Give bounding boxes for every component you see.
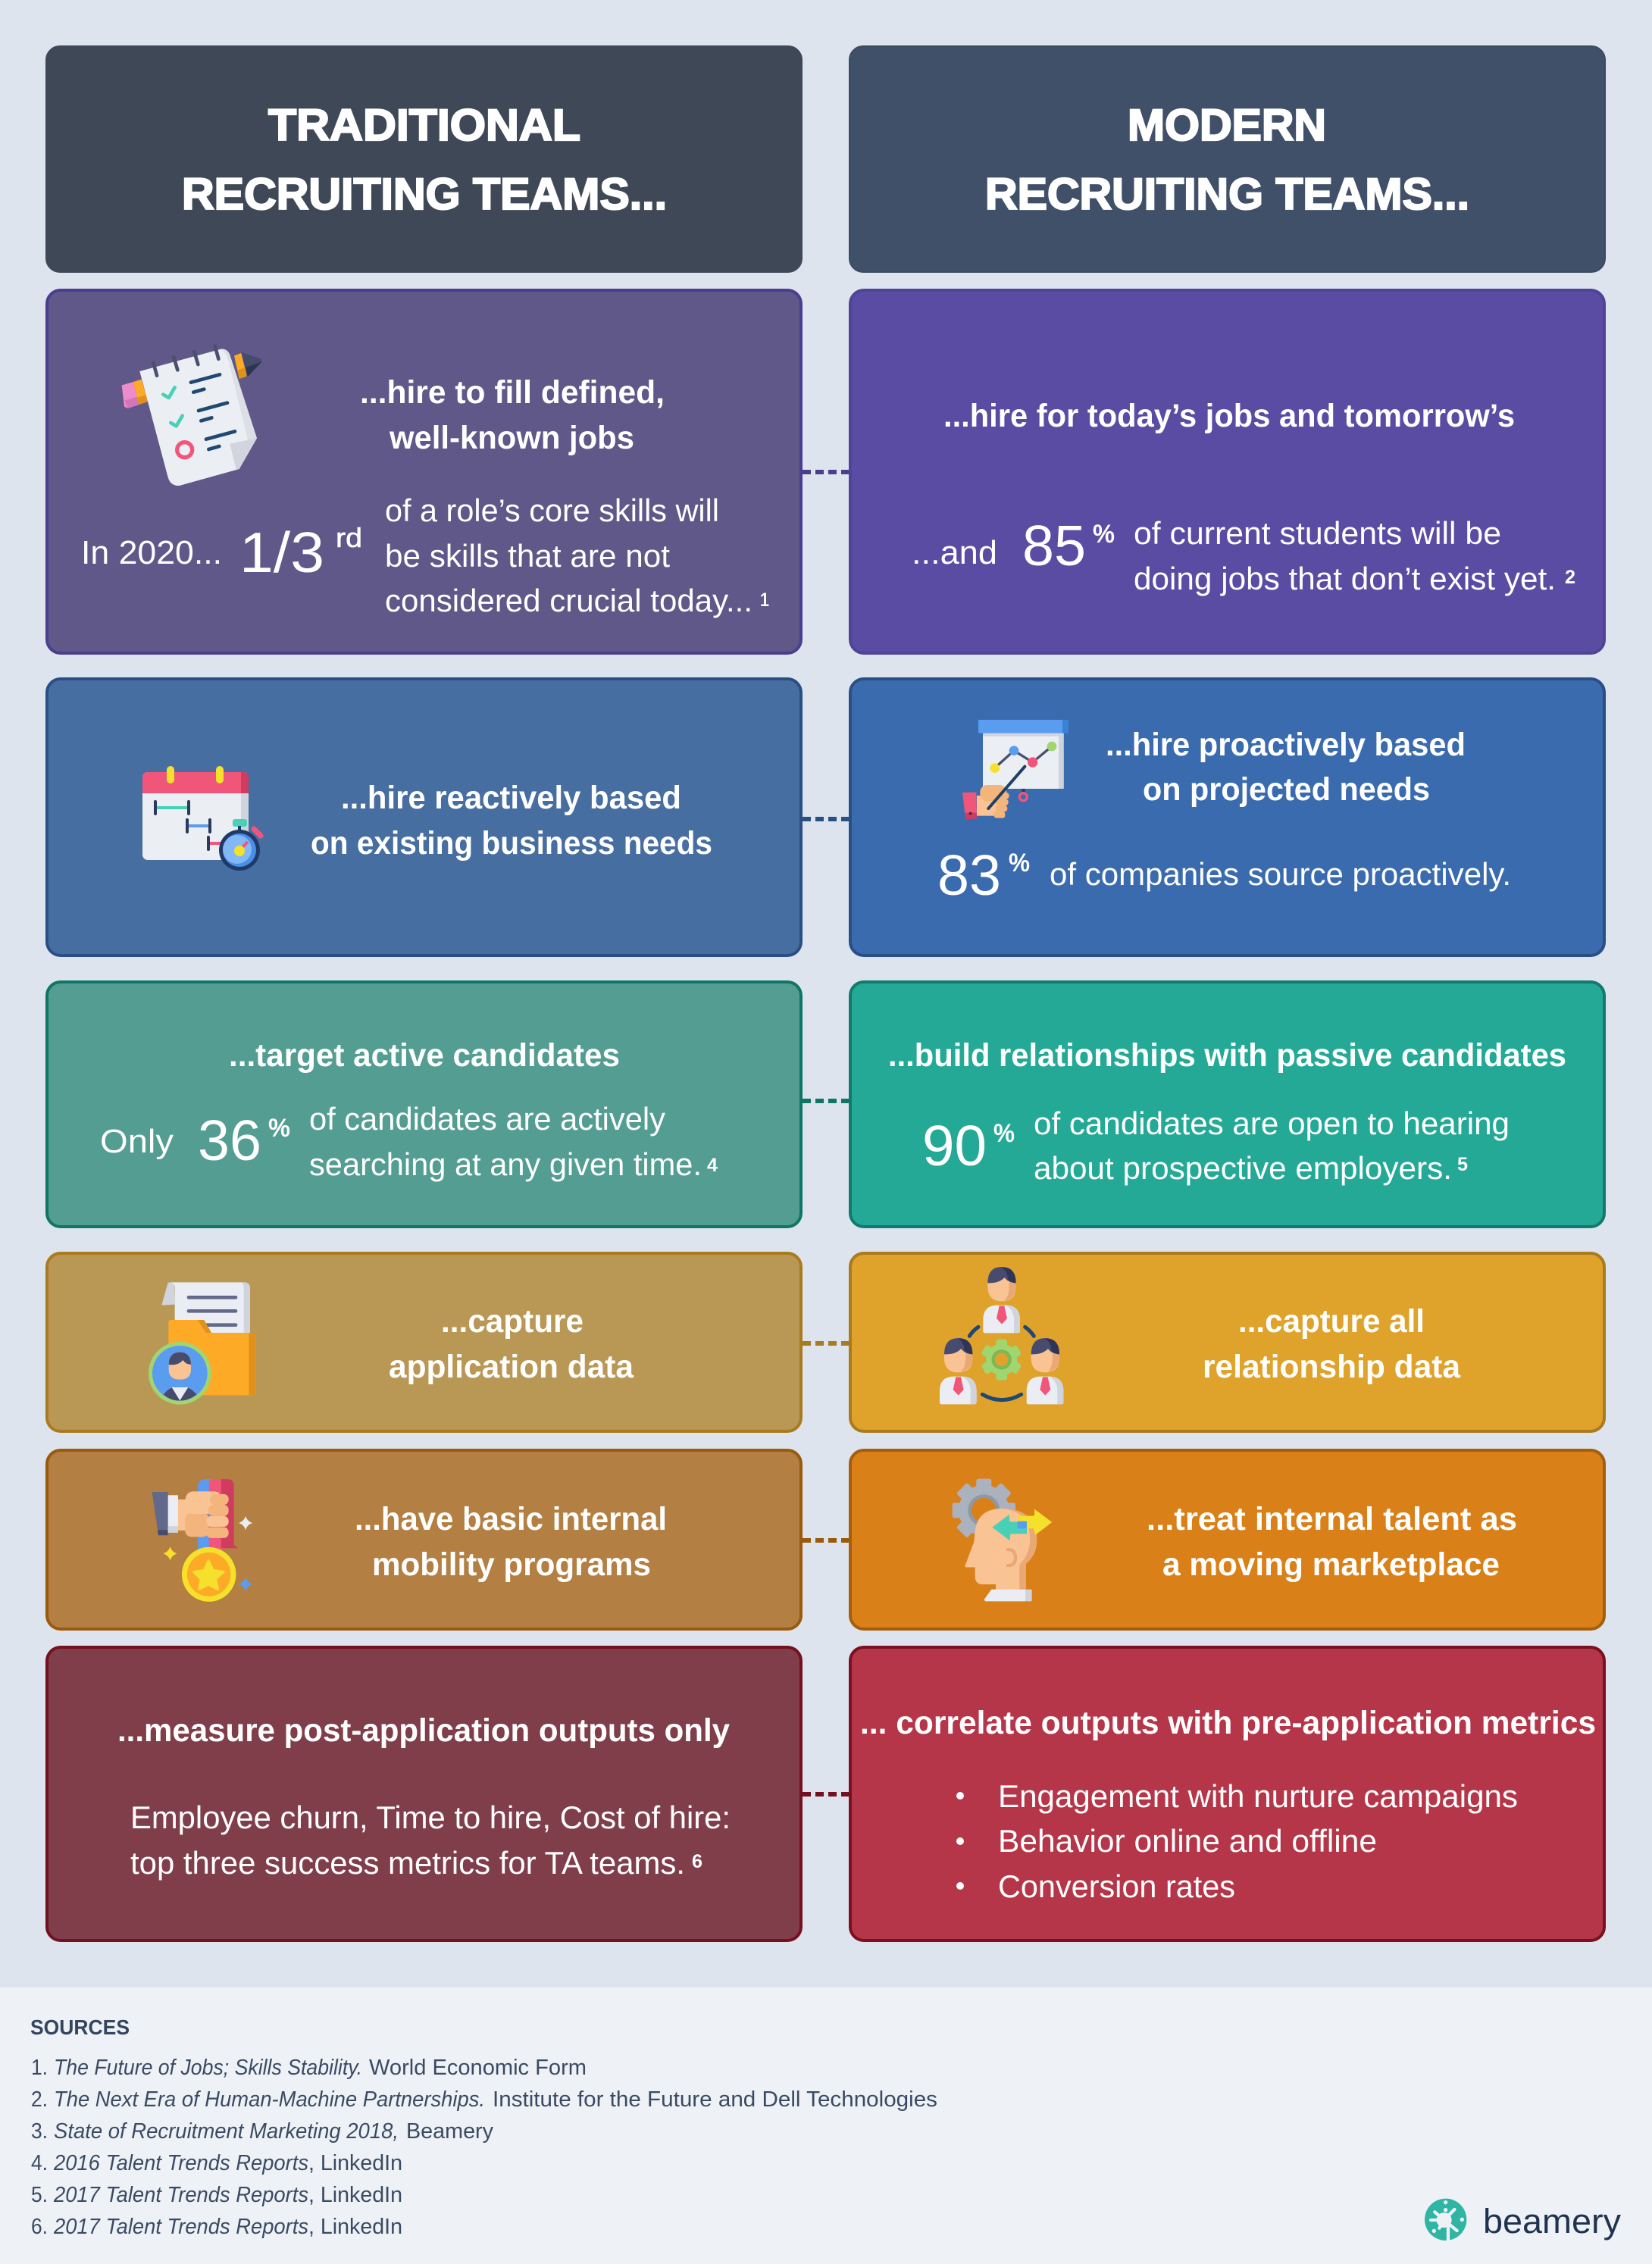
text: current students: 2 — [1565, 567, 1575, 588]
stat: only 36 percent: Only — [100, 1123, 174, 1160]
heading: correlate outputs: ... correlate outputs with pre-application metrics — [860, 1705, 1596, 1741]
heading: modern recruiting teams — [985, 101, 1469, 219]
icon: hand holding medal — [152, 1479, 252, 1602]
text: top three success metrics: top three success metrics for TA teams. — [130, 1845, 685, 1881]
heading: hire reactively: on existing business needs — [311, 825, 712, 862]
stat: 83 percent: 83 — [937, 843, 1001, 907]
heading: basic internal mobility: mobility programs — [372, 1546, 651, 1583]
heading: hire proactively — [1106, 727, 1466, 808]
text: core skills explanation: be skills that are not — [385, 538, 670, 574]
icon: calendar with stopwatch — [142, 766, 261, 871]
source 2: The Next Era of Human-Machine Partnerships. — [54, 2087, 485, 2112]
text: core skills explanation — [385, 493, 769, 618]
stat: and 85 percent — [912, 514, 1115, 577]
heading: capture all relationship data — [1203, 1303, 1461, 1385]
stat: 90 percent: % — [993, 1119, 1015, 1148]
stat: only 36 percent: % — [268, 1114, 290, 1143]
source 5: 5. — [31, 2183, 48, 2207]
panel: capture all relationship data — [850, 1253, 1604, 1431]
icon: folder with document and candidate — [149, 1282, 255, 1405]
connector: row 1 — [803, 470, 849, 474]
text: top three success metrics — [130, 1800, 731, 1881]
source 3: State of Recruitment Marketing 2018, — [54, 2119, 399, 2144]
icon: presentation board with hand — [962, 720, 1068, 820]
list: pre-application metrics: Conversion rates — [998, 1868, 1235, 1904]
text: top three success metrics: 6 — [692, 1851, 702, 1872]
panel: build relationships with passive candidates — [850, 982, 1604, 1227]
source 2 — [31, 2087, 937, 2112]
icon: head with gear and arrows — [953, 1479, 1052, 1601]
text: actively searching: 4 — [707, 1155, 718, 1176]
heading: hire for today's jobs and tomorrow's: ...hire for today’s jobs and tomorrow’s — [943, 398, 1515, 434]
text: current students — [1134, 515, 1575, 596]
panel: hire proactively — [850, 679, 1604, 955]
source 4: 4. — [31, 2151, 48, 2175]
heading: capture application data — [389, 1303, 634, 1385]
connector: row 2 — [803, 817, 849, 821]
source 6: , LinkedIn — [308, 2215, 402, 2239]
text: actively searching — [309, 1101, 718, 1182]
heading: measure post-application outputs: ...measure post-application outputs only — [117, 1712, 730, 1749]
heading: capture application data: ...capture — [441, 1303, 584, 1340]
panel: sources footer — [0, 1987, 1652, 2264]
stat: only 36 percent: 36 — [198, 1109, 261, 1172]
connector: row 6 — [803, 1792, 849, 1797]
heading: hire reactively — [311, 780, 712, 862]
heading: modern recruiting teams: MODERN — [1128, 101, 1326, 150]
source 4: , LinkedIn — [308, 2151, 402, 2175]
source 1: 1. — [31, 2056, 48, 2080]
source 2: Institute for the Future and Dell Technologies — [493, 2087, 937, 2112]
list: pre-application metrics: Engagement with nurture campaigns — [998, 1778, 1518, 1814]
heading: traditional recruiting teams — [182, 101, 667, 219]
panel: target active candidates — [47, 982, 801, 1227]
panel: internal talent marketplace — [850, 1450, 1604, 1629]
source 1 — [31, 2056, 587, 2080]
stat: only 36 percent — [100, 1109, 290, 1172]
source 1: World Economic Form — [369, 2056, 587, 2080]
wordmark: beamery: beamery — [1483, 2202, 1622, 2241]
source 5: 2017 Talent Trends Reports — [53, 2183, 308, 2207]
text: core skills explanation: 1 — [760, 589, 769, 611]
text: open to hearing: about prospective employers. — [1034, 1150, 1452, 1186]
panel: hire reactively — [47, 679, 801, 955]
icon: beamery mark — [1425, 2199, 1466, 2241]
panel: hire for today's and tomorrow's jobs — [850, 290, 1604, 653]
text: open to hearing: of candidates are open to hearing — [1034, 1105, 1510, 1141]
text: top three success metrics: Employee churn, Time to hire, Cost of hire: — [130, 1800, 731, 1835]
heading: capture all relationship data: relationship data — [1203, 1349, 1461, 1385]
heading: hire to fill defined jobs — [360, 374, 665, 456]
text: current students: doing jobs that don’t exist yet. — [1134, 561, 1556, 596]
stat: and 85 percent: 85 — [1022, 514, 1086, 577]
text: actively searching: of candidates are actively — [309, 1101, 665, 1137]
heading: capture all relationship data: ...capture all — [1238, 1303, 1425, 1340]
panel: basic internal mobility — [47, 1450, 801, 1629]
text: actively searching: searching at any given time. — [309, 1146, 702, 1182]
panel: hire to fill defined jobs — [47, 290, 801, 653]
connector: row 3 — [803, 1099, 849, 1103]
stat: in 2020 one third: rd — [336, 522, 362, 553]
icon: notepad checklist with pencil — [122, 346, 262, 486]
source 3: Beamery — [406, 2119, 493, 2144]
stat: 83 percent — [937, 843, 1030, 907]
panel: measure post-application outputs — [47, 1647, 801, 1940]
heading: internal talent marketplace: a moving marketplace — [1162, 1546, 1500, 1583]
stat: in 2020 one third: In 2020... — [81, 534, 222, 571]
stat: in 2020 one third: 1/3 — [239, 521, 324, 584]
text: open to hearing — [1034, 1105, 1510, 1186]
source 3: 3. — [31, 2119, 48, 2144]
list: pre-application metrics: Behavior online and offline — [998, 1823, 1377, 1859]
stat: 90 percent: 90 — [922, 1114, 987, 1177]
source 2: 2. — [31, 2087, 48, 2112]
text: companies source proactively: of companies source proactively. — [1050, 856, 1511, 892]
text: core skills explanation: of a role’s core skills will — [385, 493, 719, 528]
stat: and 85 percent: % — [1093, 520, 1115, 549]
heading: hire proactively: ...hire proactively based — [1106, 727, 1466, 763]
heading: internal talent marketplace — [1147, 1501, 1517, 1583]
heading: capture application data: application data — [389, 1349, 634, 1385]
heading: internal talent marketplace: ...treat internal talent as — [1147, 1501, 1517, 1537]
text: core skills explanation: considered crucial today... — [385, 583, 752, 618]
stat: in 2020 one third — [81, 521, 362, 584]
icon: three people around gear — [940, 1267, 1063, 1404]
stat: 83 percent: % — [1009, 849, 1030, 877]
heading: hire to fill defined jobs: ...hire to fill defined, — [360, 374, 665, 411]
text: open to hearing: 5 — [1457, 1154, 1468, 1175]
source 5: , LinkedIn — [308, 2183, 402, 2207]
heading: hire to fill defined jobs: well-known jobs — [389, 420, 634, 456]
heading: modern recruiting teams: RECRUITING TEAMS... — [985, 170, 1469, 219]
heading: basic internal mobility — [355, 1501, 667, 1583]
source 4: 2016 Talent Trends Reports — [53, 2151, 308, 2175]
connector: row 4 — [803, 1341, 849, 1346]
source 6: 2017 Talent Trends Reports — [53, 2215, 308, 2239]
connector: row 5 — [803, 1538, 849, 1543]
heading: traditional recruiting teams: TRADITIONAL — [268, 101, 580, 150]
source 6: 6. — [31, 2215, 48, 2239]
heading: build relationships: ...build relationships with passive candidates — [888, 1037, 1566, 1074]
text: current students: of current students will be — [1134, 515, 1501, 551]
panel: correlate outputs — [850, 1647, 1604, 1940]
source 1: The Future of Jobs; Skills Stability. — [54, 2056, 362, 2080]
panel: traditional header — [46, 46, 802, 272]
heading: traditional recruiting teams: RECRUITING TEAMS... — [182, 170, 667, 219]
heading: hire reactively: ...hire reactively based — [341, 780, 681, 816]
heading: basic internal mobility: ...have basic internal — [355, 1501, 667, 1537]
stat: and 85 percent: ...and — [912, 534, 997, 571]
heading: sources: SOURCES — [30, 2015, 130, 2039]
logo: beamery — [1425, 2199, 1622, 2241]
heading: target active candidates: ...target active candidates — [229, 1037, 620, 1074]
list: pre-application metrics — [956, 1778, 1518, 1904]
stat: 90 percent — [922, 1114, 1015, 1177]
heading: hire proactively: on projected needs — [1143, 771, 1430, 808]
panel: modern header — [849, 46, 1605, 272]
panel: capture application data — [47, 1253, 801, 1431]
